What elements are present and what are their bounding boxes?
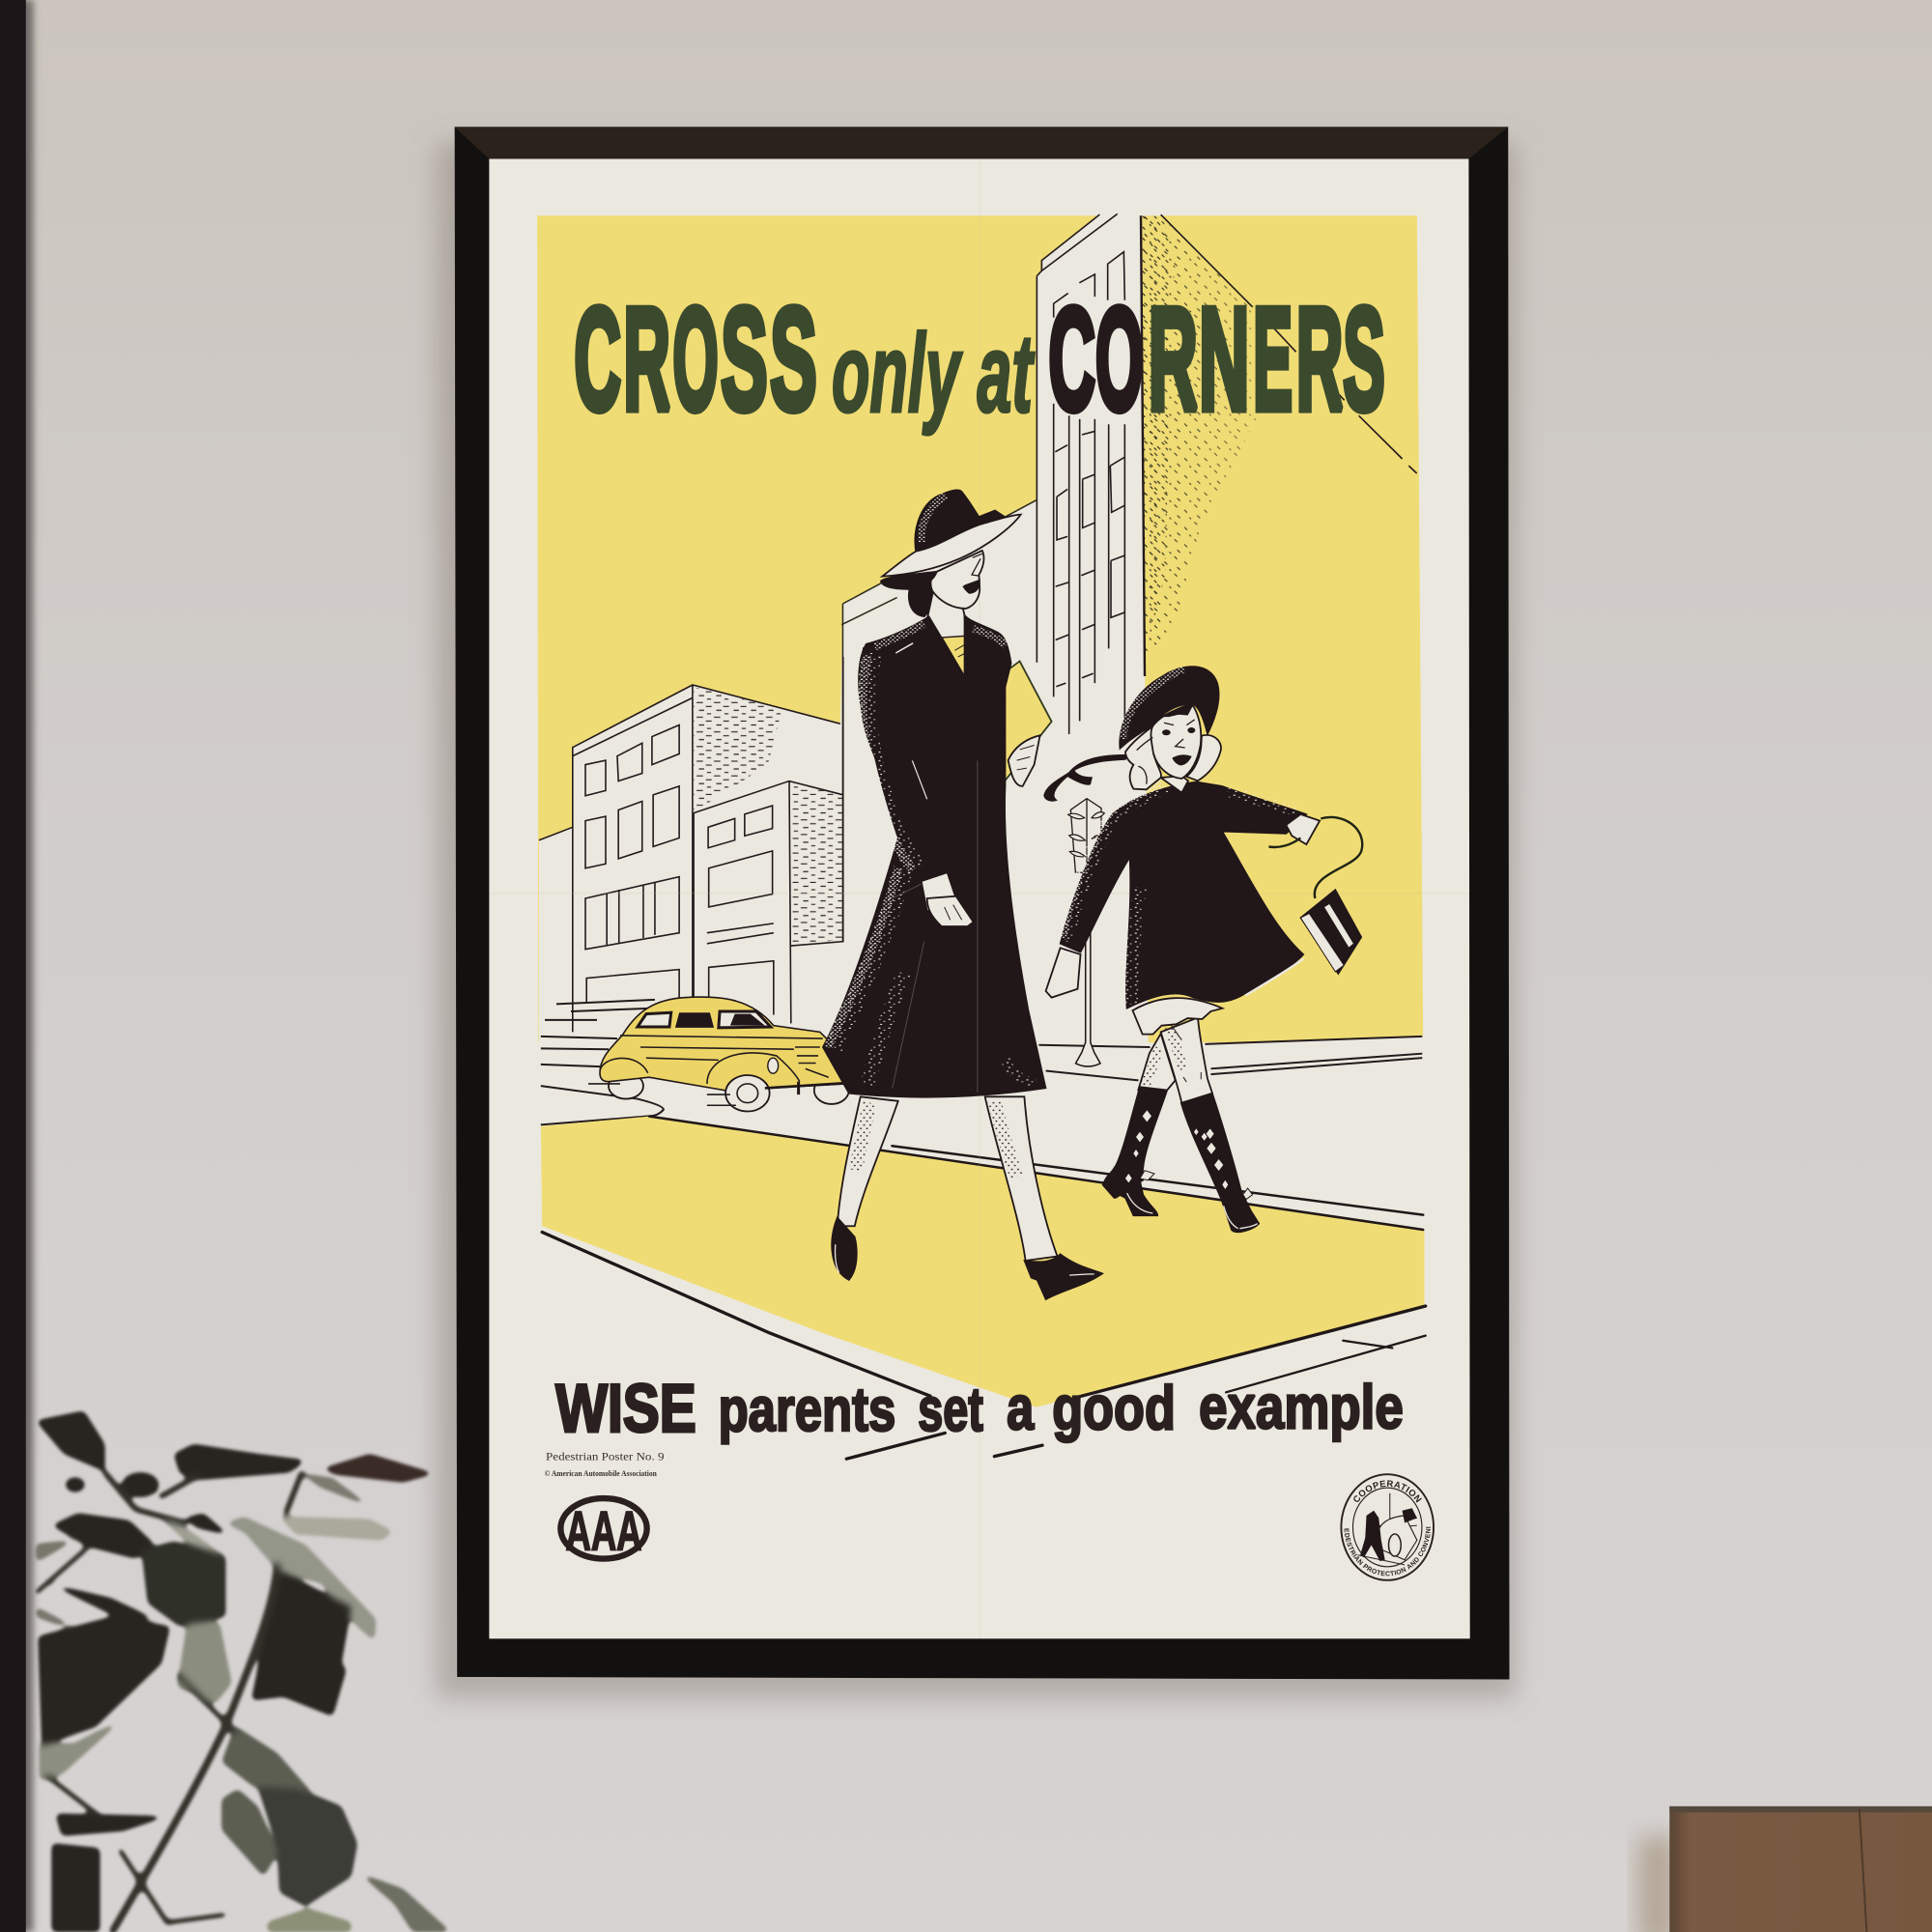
- title word: CROSS: [574, 277, 817, 440]
- title word: CO on tower: C: [1048, 277, 1095, 440]
- girl dress: [1061, 781, 1306, 1009]
- picture frame: [455, 127, 1509, 1680]
- AAA logo: AAA: [565, 1501, 642, 1563]
- title word: CROSS: R: [623, 277, 670, 440]
- AAA logo: [560, 1498, 647, 1563]
- badge policeman figure: [1360, 1511, 1385, 1561]
- slogan: good: good: [1052, 1374, 1176, 1443]
- yellow sidewalk: [541, 1117, 1424, 1407]
- title word: CROSS: S: [721, 277, 768, 440]
- girl legs and argyle socks: [1103, 1017, 1259, 1232]
- slogan: a: a: [1007, 1374, 1035, 1443]
- slogan: parents: parents: [719, 1375, 895, 1444]
- stipple on tower side wall: [1142, 216, 1259, 659]
- bottom slogan: [555, 1370, 1404, 1446]
- title: [574, 277, 1385, 440]
- woman with hat and coat: [823, 490, 1102, 1299]
- slogan: example: example: [1199, 1372, 1404, 1441]
- title word: RNERS: R: [1296, 277, 1343, 440]
- coat: [823, 648, 1046, 1097]
- dark plant leaves: [36, 1410, 435, 1932]
- girl with beret: [1044, 667, 1362, 1232]
- title word: RNERS: R: [1149, 277, 1198, 440]
- street and curb lines: [541, 1000, 1422, 1124]
- title: S: [770, 277, 817, 440]
- girl head, hair, ribbon and beret: [1044, 667, 1221, 801]
- poster scene on wall: S: [1343, 277, 1385, 440]
- copyright line: © American Automobile Association: [545, 1469, 657, 1478]
- slogan: set: set: [918, 1375, 983, 1444]
- grey plant leaves: [40, 1719, 312, 1877]
- frame shadow: [437, 143, 1516, 1698]
- title word: RNERS: N: [1199, 277, 1249, 440]
- plant in foreground: [36, 1410, 451, 1932]
- title word: CROSS: O: [672, 277, 719, 440]
- badge text top: COOPERATION: [1353, 1480, 1422, 1503]
- bloomers lace: [1133, 998, 1222, 1035]
- cooperation badge: [1340, 1473, 1435, 1581]
- pale plant leaves: [36, 1472, 451, 1932]
- illustration: [491, 160, 1468, 1638]
- handbag and strap: [1268, 817, 1362, 974]
- yellow sky: [537, 215, 1423, 1042]
- cream buildings and street ground: [539, 214, 1426, 1355]
- back building roof lines: [841, 500, 1037, 941]
- girl hands: [1046, 814, 1320, 998]
- poster fold lines: [491, 160, 1468, 1638]
- woman legs and shoes: [832, 1096, 1102, 1299]
- badge text bottom: FOR PEDESTRIAN PROTECTION AND CONVENIENCE: [1345, 1526, 1431, 1577]
- title word: RNERS: E: [1253, 277, 1293, 440]
- title words: only at: only at: [832, 312, 1036, 436]
- slogan: WISE: WISE: [555, 1370, 696, 1446]
- coat and hat shading: [863, 496, 1006, 870]
- title word: CROSS: C: [574, 277, 621, 440]
- plant stems: [36, 1472, 301, 1932]
- dark left door edge: [0, 0, 33, 1932]
- traffic light: [1068, 799, 1104, 1066]
- poster number credit: Pedestrian Poster No. 9: [546, 1451, 665, 1463]
- poster paper: [489, 159, 1470, 1638]
- title: O: [1095, 277, 1144, 440]
- sidewalk edge lines: [542, 1117, 1426, 1459]
- head, hat and upper coat: [859, 490, 1021, 760]
- wooden box bottom right: [1638, 1806, 1932, 1932]
- taxi car: [588, 997, 852, 1112]
- title word: RNERS: [1149, 277, 1385, 440]
- left buildings: [539, 657, 843, 1032]
- tower line art: [1037, 213, 1417, 734]
- book under arm: [988, 661, 1052, 791]
